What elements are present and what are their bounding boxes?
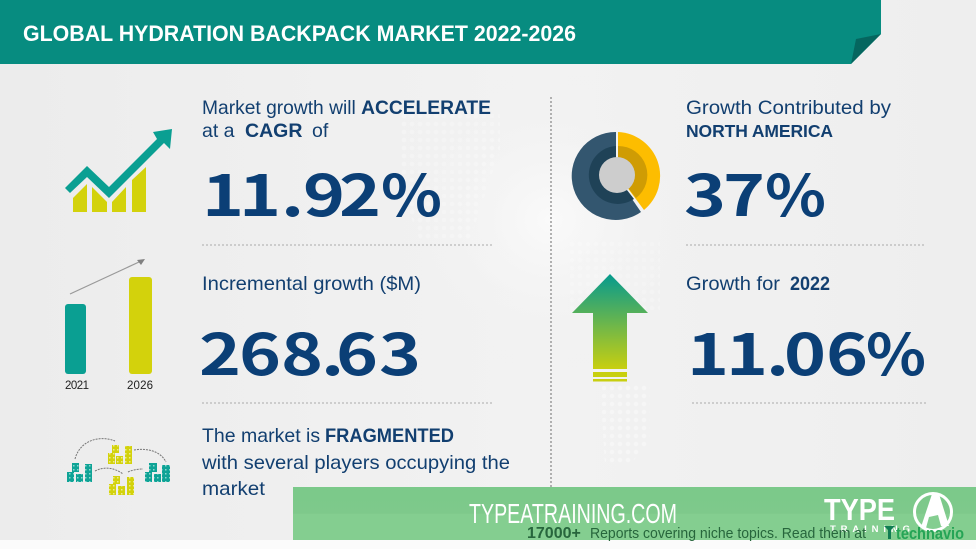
icon: bar comparison 2021 to 2026: 2021 (65, 380, 89, 392)
decorative dot maps (400, 110, 500, 240)
text: growth for 2022: Growth for (686, 273, 781, 295)
watermark band (293, 487, 976, 540)
icon: growth chart with arrow (65, 129, 172, 212)
number: regional share: % (765, 151, 826, 233)
number: 2022 growth: % (866, 310, 926, 392)
title banner (0, 0, 881, 64)
icon: gradient up arrow (572, 274, 648, 382)
text: CAGR line: of (312, 120, 329, 142)
number: 2022 growth: 11.06 (687, 309, 868, 392)
text: fragmented: market (202, 478, 266, 500)
text: fragmented: with several players occupying the (201, 452, 510, 474)
logo: type training: TYPE (824, 492, 895, 527)
text: growth for 2022: 2022 (790, 273, 830, 295)
text: fragmented: FRAGMENTED (325, 425, 454, 447)
number: CAGR value: 11.92 (202, 150, 381, 233)
logo: type training (824, 492, 952, 535)
number: regional share (684, 150, 826, 233)
footer text: 17000+ (527, 525, 581, 542)
footer text: Reports covering niche topics. Read them at (590, 525, 867, 542)
number: CAGR value: % (381, 151, 442, 233)
website name: TYPEATRAINING.COM (469, 498, 677, 529)
logo: technavio: technavio (896, 524, 964, 543)
text: fragmented (201, 425, 510, 500)
number: regional share: 37 (684, 150, 765, 233)
icon: bar comparison 2021 to 2026: 2026 (127, 380, 153, 392)
text: north america: NORTH AMERICA (686, 121, 833, 141)
text: incremental growth: Incremental growth ($M) (202, 273, 421, 295)
icon: donut chart (572, 132, 660, 220)
white strip under band (0, 540, 976, 549)
icon: bar comparison 2021 to 2026 (65, 259, 153, 392)
title: GLOBAL HYDRATION BACKPACK MARKET 2022-2026 (23, 21, 576, 46)
text: fragmented: The market is (202, 425, 320, 447)
logo: type training: TRAINING (830, 524, 910, 535)
text: growth contributed: Growth Contributed by (686, 97, 891, 119)
text: CAGR line: at a (202, 120, 235, 142)
text: market growth: Market growth will ACCELERATE (202, 97, 491, 119)
text: CAGR line: CAGR (245, 120, 302, 142)
icon: fragmented buildings network (67, 439, 170, 495)
number: incremental value: 268.63 (199, 309, 421, 392)
